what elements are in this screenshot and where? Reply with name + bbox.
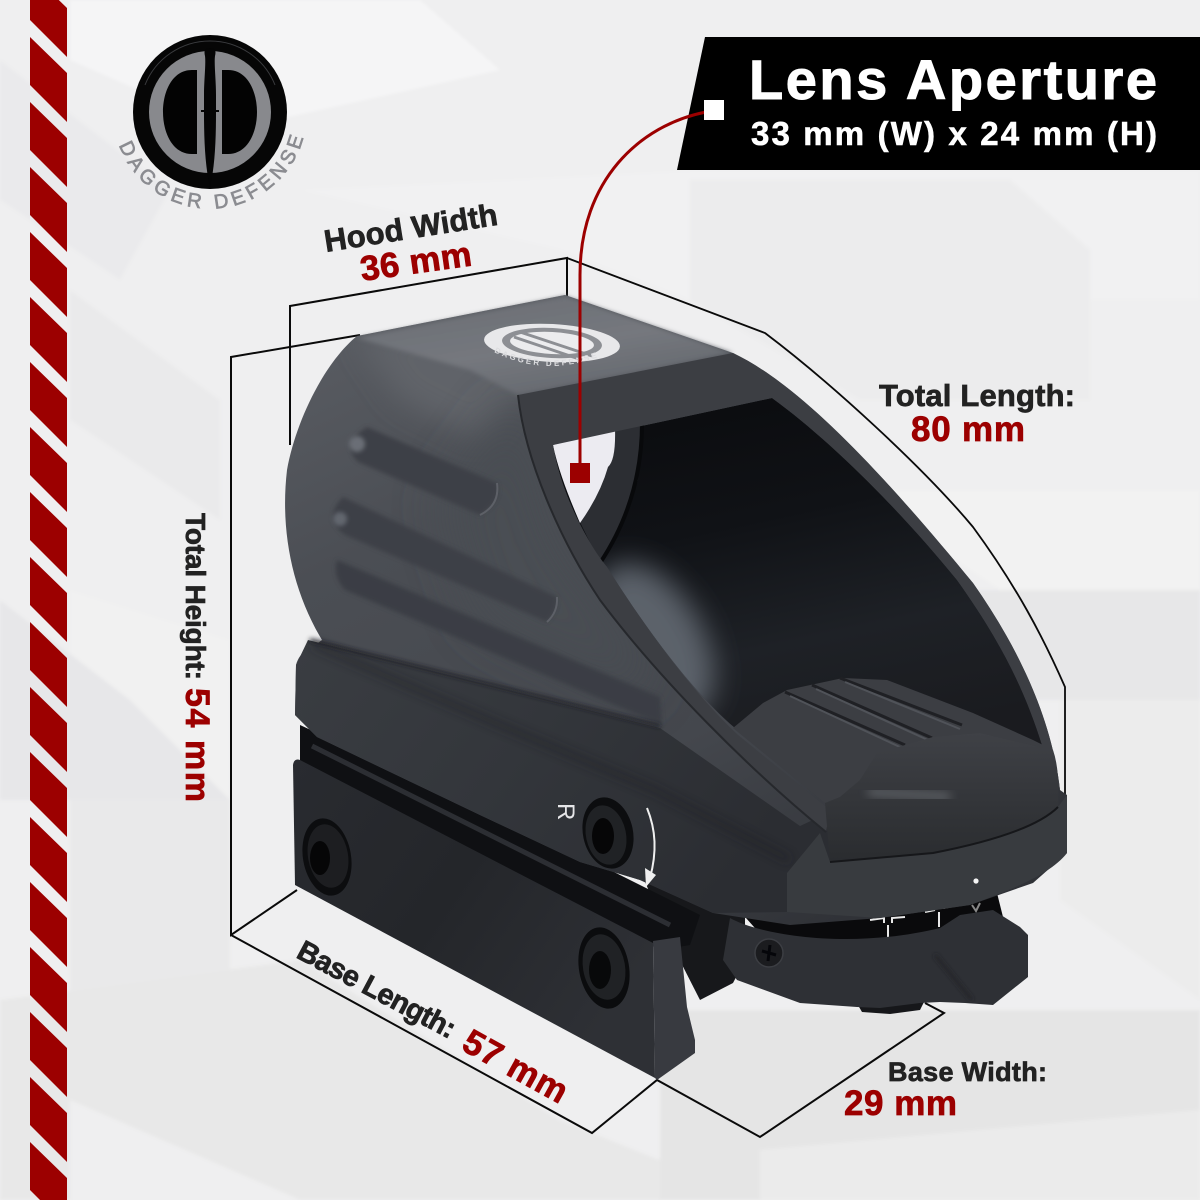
label: total height: Total Height: (180, 513, 211, 680)
rail screw: left (297, 814, 357, 900)
lens ring (580, 423, 642, 563)
front rim (787, 795, 1067, 918)
groove 3 (336, 560, 662, 725)
grip top (733, 678, 1053, 803)
value: 80 mm: 80 mm (911, 410, 1025, 449)
rotation arrow (645, 808, 656, 887)
value: 57 mm: 57 mm (456, 1022, 575, 1111)
red diagonal stripe band (30, 0, 67, 1200)
grip ridges (785, 678, 962, 745)
logo dagger (201, 48, 219, 188)
label: hood width (322, 197, 500, 289)
groove 1 (349, 427, 498, 515)
banner heading: Lens Aperture (749, 48, 1157, 111)
main housing (285, 295, 1067, 925)
label: hood width: Hood Width (322, 197, 500, 259)
lower mount band (295, 640, 830, 913)
rail to body shadow (640, 870, 745, 1000)
locking lever (723, 910, 1028, 1008)
callout line (570, 100, 724, 483)
groove 2 (333, 497, 557, 622)
value: 36 mm: 36 mm (358, 235, 474, 289)
bottom nub (855, 1000, 925, 1014)
band shadow line (312, 644, 790, 860)
hood front frame (518, 353, 1060, 832)
rotating dial (730, 885, 1005, 955)
grip front block (825, 733, 1058, 862)
label: base length: Base Length: (292, 935, 461, 1045)
hood interior (553, 398, 1042, 745)
R marking: R (552, 803, 579, 820)
lever screw (755, 939, 783, 967)
callout marker: lens (570, 463, 590, 483)
top engraved logo (484, 324, 620, 366)
lens window (553, 428, 615, 523)
logo: Dagger Defense (119, 35, 304, 209)
callout marker: banner (704, 100, 724, 120)
adjustment screw (576, 793, 640, 873)
top engraved logo: DAGGER DEFENSE (494, 348, 596, 366)
housing shading (366, 295, 684, 429)
red dot sight product (285, 293, 1067, 1080)
lens aperture banner (677, 37, 1200, 170)
logo disc (133, 35, 287, 189)
top face (357, 296, 733, 395)
dial reticle marks (870, 903, 980, 937)
label: total height (178, 513, 216, 802)
banner measurement: 33 mm (W) x 24 mm (H) (751, 115, 1157, 152)
dimension outlines (231, 258, 1065, 1137)
value: 54 mm: 54 mm (178, 688, 216, 802)
label: base length (292, 935, 575, 1111)
label: total length: Total Length: (879, 378, 1075, 413)
value: 29 mm: 29 mm (844, 1084, 957, 1123)
label: total length (879, 378, 1075, 449)
interior light sheen (603, 547, 730, 712)
label: base width (844, 1057, 1047, 1123)
logo wordmark: DAGGER DEFENSE (119, 134, 304, 209)
logo grey double D (149, 51, 271, 173)
mounting rail end (653, 937, 695, 1080)
label: base width: Base Width: (888, 1057, 1047, 1087)
rail screw: right (572, 923, 636, 1013)
mounting rail back slot (300, 725, 700, 950)
mounting rail front face (293, 760, 655, 1078)
rim dot (973, 878, 979, 884)
